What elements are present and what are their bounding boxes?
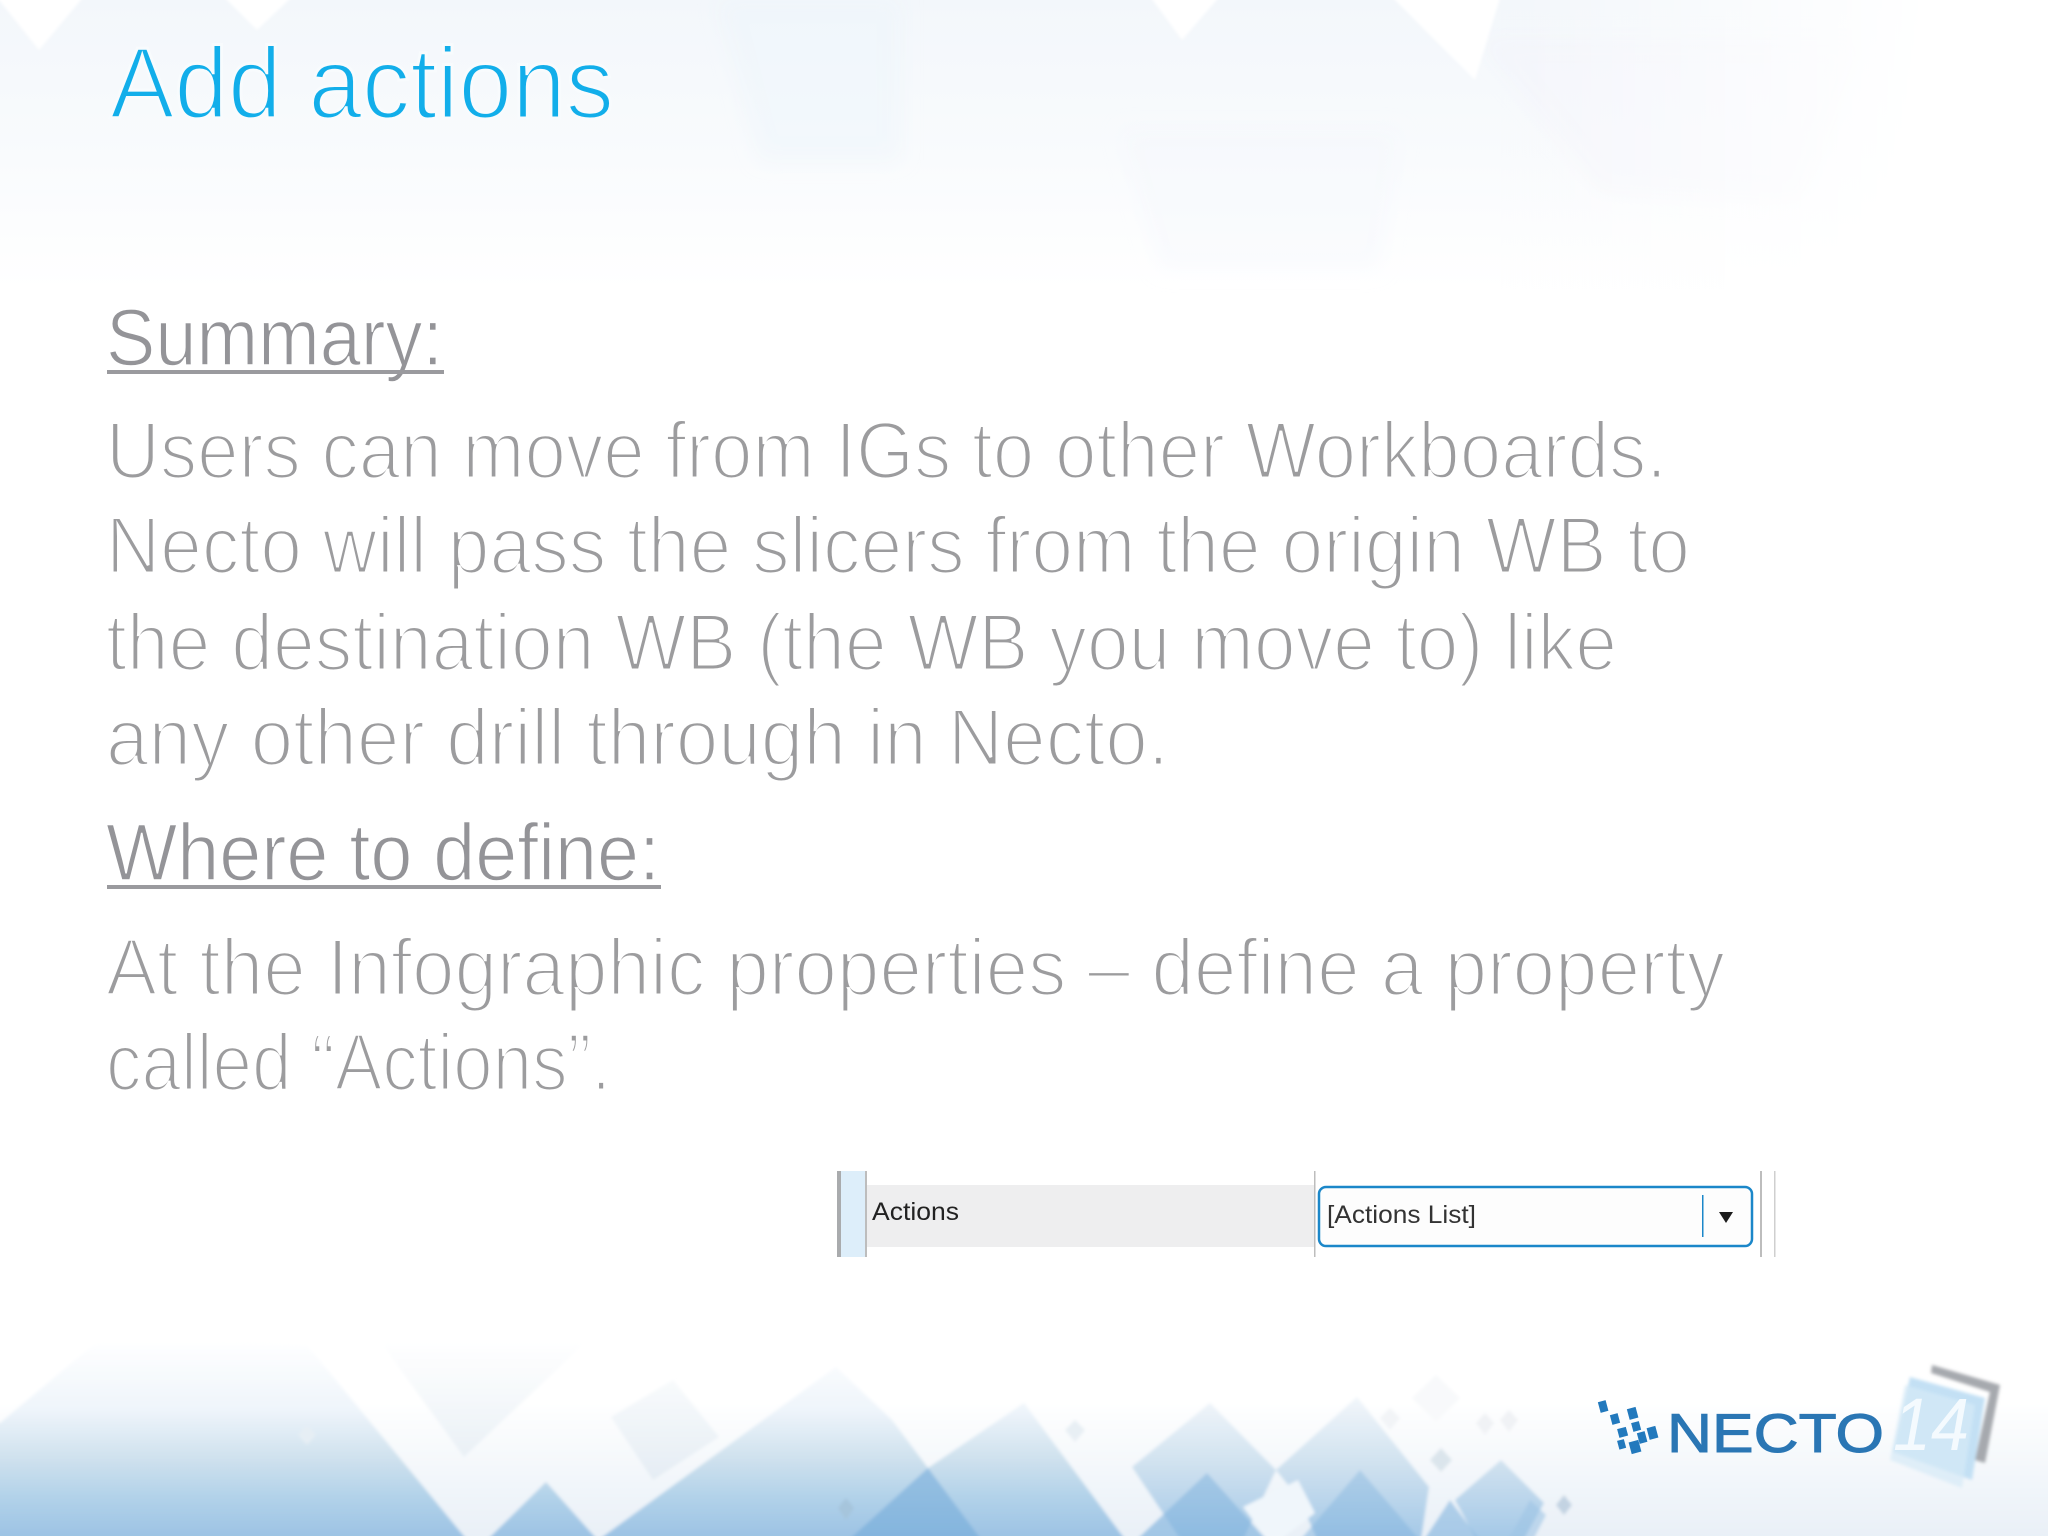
property grid screenshot: Actions row: [Actions List]: [1327, 1201, 1476, 1229]
title: Add actions: [110, 28, 614, 140]
text block: summary description: Users can move from IGs to other Workboards.: [106, 406, 1667, 496]
text block: summary description: any other drill through in Necto.: [106, 693, 1169, 783]
background: bottom blue diamond pattern: [0, 1330, 2048, 1536]
logo icon: book pages: [1890, 1365, 2000, 1488]
text block: summary description: [106, 406, 1690, 783]
text block: where to define description: called “Actions”.: [106, 1018, 611, 1108]
heading: Where to define: Where to define:: [106, 808, 660, 898]
property grid screenshot: Actions row: Actions: [872, 1198, 959, 1226]
text block: summary description: Necto will pass the slicers from the origin WB to: [106, 501, 1690, 591]
logo icon: blue squares: [1598, 1400, 1658, 1454]
text block: summary description: the destination WB (the WB you move to) like: [106, 598, 1617, 688]
background: top pattern: [0, 0, 2048, 290]
property grid screenshot: Actions row: [837, 1171, 1776, 1257]
text block: where to define description: At the Infographic properties – define a property: [106, 923, 1725, 1013]
logo wordmark: NECTO: [1667, 1402, 1884, 1464]
heading: Summary: Summary:: [106, 293, 443, 383]
logo: Necto 14: [1598, 1365, 2000, 1488]
text block: where to define description: [106, 923, 1725, 1108]
logo number 14: 14: [1893, 1383, 1969, 1466]
